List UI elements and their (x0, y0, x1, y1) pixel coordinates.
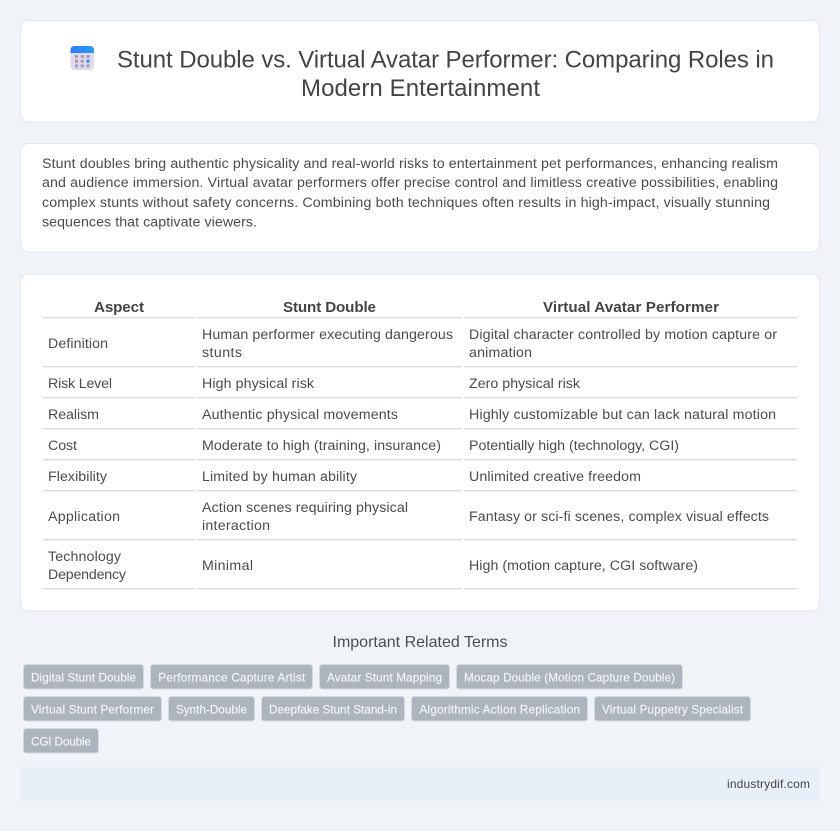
row: technology dependency: Dependency (48, 567, 127, 583)
intro text: complex stunts without safety concerns. Combining both techniques often results in high-impact, visually stunning (42, 195, 770, 211)
row: definition: Definition (48, 336, 108, 352)
panel: comparison table (20, 274, 820, 611)
tag: Mocap Double (Motion Capture Double) (464, 672, 675, 684)
tag (24, 696, 162, 721)
intro text (42, 156, 778, 230)
tag: Synth-Double (176, 704, 247, 716)
tag (320, 664, 450, 689)
tag: Avatar Stunt Mapping (327, 672, 442, 684)
tag (168, 696, 254, 721)
row: application: interaction (202, 518, 270, 534)
tag: Digital Stunt Double (31, 672, 136, 684)
table header row: Virtual Avatar Performer (543, 299, 719, 316)
heading: important related terms: Important Related Terms (332, 634, 508, 651)
tag: Virtual Stunt Performer (31, 704, 154, 716)
row: definition (48, 327, 777, 361)
tag: CGI Double (31, 736, 91, 748)
row: realism: Highly customizable but can lack natural motion (469, 407, 776, 423)
row: technology dependency: Minimal (202, 558, 253, 574)
row: risk level: High physical risk (202, 376, 315, 392)
tag (412, 696, 588, 721)
row: risk level (48, 376, 581, 392)
tag (24, 728, 98, 753)
intro text: sequences that captivate viewers. (42, 214, 257, 230)
title: Stunt Double vs. Virtual Avatar Performer: Comparing Roles in (117, 46, 774, 74)
table header row: Aspect (94, 299, 144, 316)
row: flexibility (48, 469, 641, 485)
row: realism: Authentic physical movements (202, 407, 398, 423)
table header row: Stunt Double (283, 299, 376, 316)
tag: Performance Capture Artist (158, 672, 306, 684)
row: technology dependency: High (motion capture, CGI software) (469, 558, 698, 574)
table header row (94, 299, 719, 316)
row: application (48, 500, 769, 534)
row: technology dependency (48, 549, 698, 583)
icon: calendar (70, 46, 94, 70)
row: technology dependency: Technology (48, 549, 122, 565)
intro text: Stunt doubles bring authentic physicality and real-world risks to entertainment pet performances, enhancing realism (42, 156, 778, 172)
tag: Deepfake Stunt Stand-in (269, 704, 397, 716)
row: application: Application (48, 509, 120, 525)
tag (594, 696, 750, 721)
row: flexibility: Limited by human ability (202, 469, 358, 485)
row: cost: Moderate to high (training, insurance) (202, 438, 441, 454)
row: definition: stunts (202, 345, 242, 361)
title: Modern Entertainment (301, 75, 540, 102)
footer bar (20, 767, 820, 801)
row: definition: animation (469, 345, 532, 361)
row: definition: Digital character controlled by motion capture or (469, 327, 777, 343)
row: definition: Human performer executing dangerous (202, 327, 453, 343)
row: application: Fantasy or sci-fi scenes, complex visual effects (469, 509, 769, 525)
row: realism (48, 407, 776, 423)
intro text: and audience immersion. Virtual avatar performers offer precise control and limitless creative possibilities, enabling (42, 175, 778, 191)
row: cost: Potentially high (technology, CGI) (469, 438, 679, 454)
row: risk level: Zero physical risk (469, 376, 581, 392)
row: cost: Cost (48, 438, 77, 454)
related term tags (24, 664, 750, 753)
tag (24, 664, 144, 689)
tag (456, 664, 682, 689)
header panel (20, 20, 820, 122)
footer source text: industrydif.com (727, 777, 810, 791)
row: flexibility: Unlimited creative freedom (469, 469, 641, 485)
tag: Algorithmic Action Replication (420, 704, 580, 716)
row: cost (48, 438, 679, 454)
tag (262, 696, 404, 721)
row: flexibility: Flexibility (48, 469, 108, 485)
row: risk level: Risk Level (48, 376, 112, 392)
row: realism: Realism (48, 407, 99, 423)
row: application: Action scenes requiring physical (202, 500, 408, 516)
panel: intro paragraph (20, 144, 820, 252)
tag (150, 664, 312, 689)
title (117, 46, 774, 102)
tag: Virtual Puppetry Specialist (602, 704, 744, 716)
